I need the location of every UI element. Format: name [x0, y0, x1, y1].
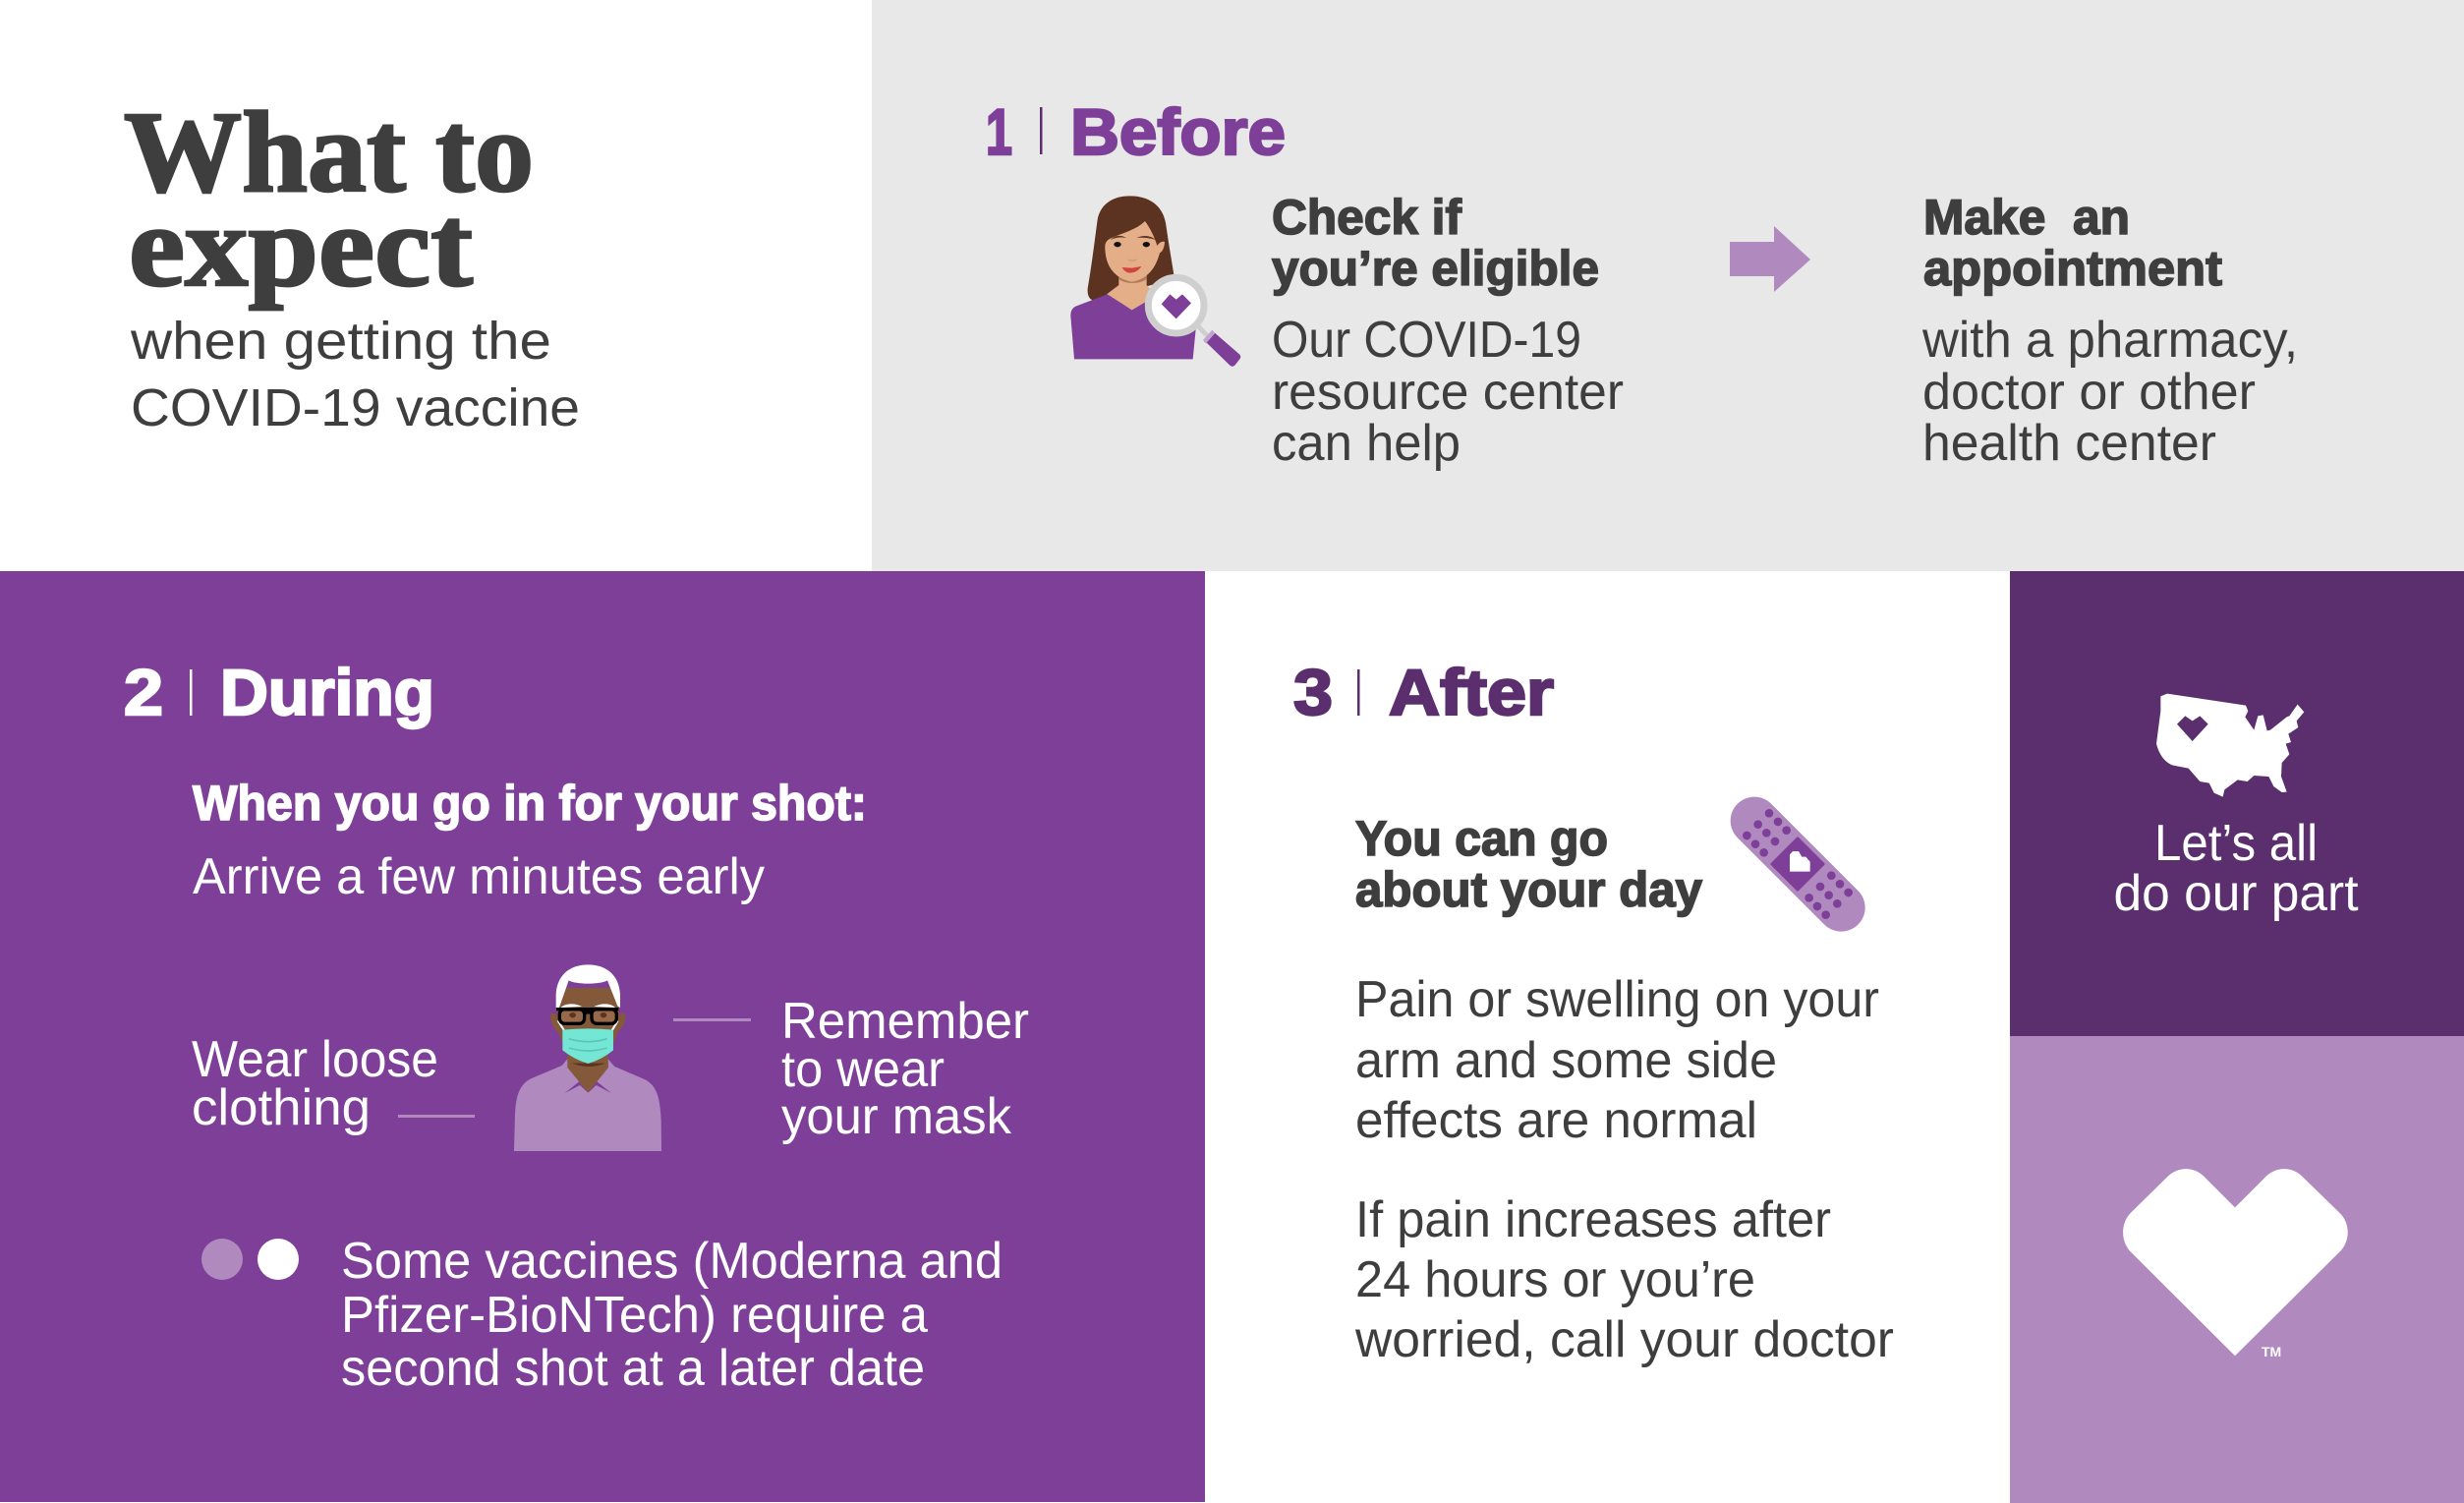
heading: 1 Before: 1: [986, 95, 1012, 168]
subtitle: COVID-19 vaccine: [131, 378, 580, 437]
text: check if you're eligible: resource center: [1272, 364, 1624, 421]
label: remember to wear your mask: to wear: [781, 1041, 945, 1098]
heading: 1 Before: [986, 95, 1286, 168]
text: check if you're eligible: [1272, 190, 1624, 472]
heading: 2 During: [124, 656, 434, 728]
text: if pain increases: [1354, 1191, 1894, 1368]
panel: after: [1293, 656, 1894, 1368]
icon: man with mask: [514, 964, 661, 1151]
text: you can go about your day: [1355, 811, 1702, 917]
trademark: TM: [2262, 1344, 2281, 1359]
label: remember to wear your mask: your mask: [781, 1088, 1012, 1145]
text: check if you're eligible: Check if: [1272, 190, 1461, 245]
text: make an appointment: doctor or other: [1922, 364, 2256, 421]
panel: during: [0, 571, 1205, 1502]
text: pain or swelling: Pain or swelling on your: [1355, 971, 1879, 1028]
icon: two dots: [201, 1239, 299, 1280]
heading: 3 After: 3: [1293, 656, 1333, 728]
heading: 2 During: During: [220, 656, 434, 728]
text: make an appointment: Make an: [1923, 190, 2130, 245]
text: second shot note: second shot at a later date: [341, 1340, 925, 1397]
text: check if you're eligible: Our COVID-19: [1272, 312, 1581, 369]
icon: usa map with heart: [2156, 694, 2304, 797]
icon: bandage: [1743, 809, 1853, 919]
text: let's all do our part: Let’s all: [2154, 815, 2318, 872]
text: if pain increases: If pain increases after: [1355, 1191, 1831, 1248]
text: when you go in: Arrive a few minutes early: [193, 848, 765, 905]
text: make an appointment: appointment: [1923, 241, 2222, 296]
text: pain or swelling: [1355, 971, 1879, 1149]
text: when you go in: When you go in for your shot:: [193, 776, 867, 831]
subtitle: when getting the: [130, 312, 551, 371]
heading: 3 After: After: [1389, 656, 1554, 728]
text: second shot note: [341, 1233, 1003, 1397]
text: check if you're eligible: you’re eligible: [1272, 241, 1599, 296]
heading: 2 During: 2: [124, 656, 163, 728]
text: check if you're eligible: can help: [1272, 415, 1461, 472]
panel: title: [124, 87, 580, 437]
text: you can go about your day: about your day: [1355, 862, 1702, 917]
text: pain or swelling: effects are normal: [1355, 1092, 1757, 1149]
title heading: [124, 87, 534, 311]
label: remember to wear your mask: [673, 993, 1029, 1145]
text: make an appointment: with a pharmacy,: [1921, 312, 2298, 369]
text: make an appointment: [1921, 190, 2298, 472]
heading: 1 Before: Before: [1070, 95, 1286, 168]
icon: woman with magnifying glass: [1070, 196, 1240, 367]
label: remember to wear your mask: Remember: [781, 993, 1029, 1050]
subtitle: [130, 312, 580, 437]
heading: 3 After: [1293, 656, 1554, 728]
text: when you go in: [193, 776, 867, 905]
text: you can go about your day: You can go: [1355, 811, 1608, 866]
icon: heart: [2123, 1169, 2348, 1356]
panel: let's all do our part: [2010, 571, 2464, 1036]
text: if pain increases: 24 hours or you’re: [1355, 1251, 1755, 1308]
text: second shot note: Some vaccines (Moderna and: [341, 1233, 1003, 1290]
panel: before: [872, 0, 2464, 571]
text: second shot note: Pfizer-BioNTech) require a: [341, 1287, 928, 1344]
label: wear loose clothing: Wear loose: [192, 1031, 438, 1088]
title heading: expect: [129, 182, 473, 311]
text: make an appointment: health center: [1922, 415, 2216, 472]
text: let's all do our part: do our part: [2113, 865, 2359, 922]
title heading: What to: [124, 87, 534, 216]
text: if pain increases: worried, call your doctor: [1354, 1311, 1894, 1368]
panel: heart logo: [2010, 1036, 2464, 1503]
label: wear loose clothing: [192, 1031, 475, 1136]
text: let's all do our part: [2113, 815, 2359, 922]
text: pain or swelling: arm and some side: [1355, 1032, 1777, 1089]
label: wear loose clothing: clothing: [192, 1079, 371, 1136]
arrow: [1730, 226, 1810, 292]
